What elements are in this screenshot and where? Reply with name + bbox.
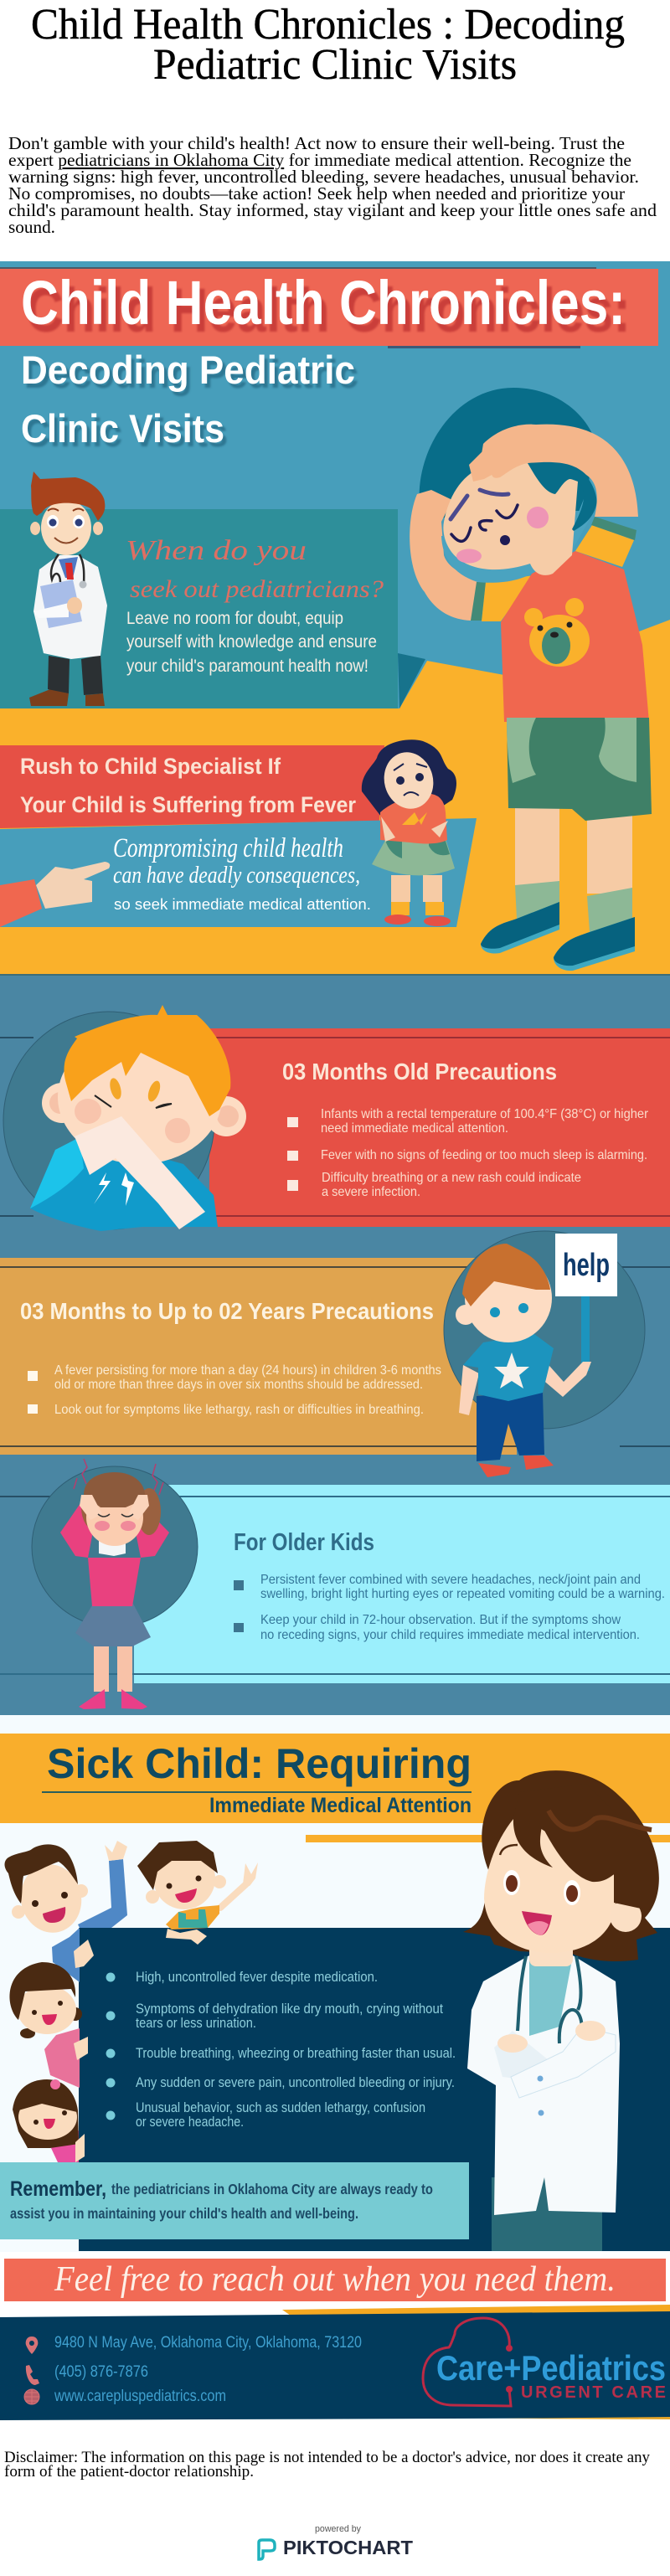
callout: when do you seek out pediatricians: When do you bbox=[126, 535, 307, 566]
title: Pediatric Clinic Visits bbox=[153, 41, 517, 89]
callout: when do you seek out pediatricians: seek out pediatricians? bbox=[130, 575, 384, 603]
callout: remember bbox=[0, 2162, 469, 2239]
panel: for older kids: Persistent fever combined with severe headaches, neck/joint pain and bbox=[260, 1573, 641, 1587]
panel: warning signs list: tears or less urination. bbox=[136, 2015, 256, 2031]
illustration: sick boy holding head bbox=[410, 388, 649, 722]
callout: remember: Remember, bbox=[10, 2177, 106, 2201]
illustration: boy shorts and legs bbox=[481, 718, 652, 971]
illustration: female doctor bbox=[463, 1770, 659, 2251]
icon: location pin bbox=[26, 2336, 38, 2354]
intro paragraph bbox=[8, 133, 657, 237]
callout: remember: assist you in maintaining your child's health and well-being. bbox=[10, 2205, 358, 2222]
callout: when do you seek out pediatricians bbox=[126, 535, 384, 676]
banner: rush to child specialist bbox=[0, 745, 384, 828]
banner: sick child requiring: Sick Child: Requiring bbox=[47, 1740, 472, 1787]
intro paragraph: child's paramount health. Stay informed, stay vigilant and keep your little ones safe and bbox=[8, 200, 657, 220]
panel: 03 months old precautions: Infants with a rectal temperature of 100.4°F (38°C) or higher bbox=[321, 1107, 649, 1121]
banner: sick child requiring bbox=[0, 1734, 670, 1842]
text: website: www.carepluspediatrics.com bbox=[54, 2388, 226, 2405]
intro paragraph: sound. bbox=[8, 217, 55, 237]
callout: when do you seek out pediatricians: your child's paramount health now! bbox=[126, 657, 368, 676]
child: girl with bow bbox=[13, 2079, 85, 2162]
intro paragraph: warning signs: high fever, uncontrolled bleeding, severe headaches, unusual behavior. bbox=[8, 167, 639, 187]
illustration: girl with headache bbox=[32, 1459, 198, 1709]
panel: warning signs list: Trouble breathing, wheezing or breathing faster than usual. bbox=[136, 2045, 456, 2061]
panel: 03 months old precautions: 03 Months Old Precautions bbox=[282, 1059, 557, 1084]
text: address: 9480 N May Ave, Oklahoma City, Oklahoma, 73120 bbox=[54, 2334, 362, 2352]
child: boy with overalls bbox=[137, 1841, 258, 1945]
piktochart credit: PIKTOCHART bbox=[283, 2537, 413, 2558]
panel: 03 months to 02 years precautions: Look out for symptoms like lethargy, rash or difficulties in breathing. bbox=[54, 1403, 424, 1417]
panel: sick child section background bbox=[0, 1715, 670, 2252]
panel: hero background bbox=[0, 261, 670, 975]
panel: 03 months old precautions bbox=[209, 1028, 670, 1227]
title: Child Health Chronicles : Decoding bbox=[31, 1, 625, 49]
banner: sick child requiring: Immediate Medical Attention bbox=[209, 1794, 472, 1817]
panel: warning signs list: Unusual behavior, such as sudden lethargy, confusion bbox=[136, 2099, 425, 2115]
panel: warning signs list bbox=[79, 1928, 670, 2251]
panel: warning signs list: Any sudden or severe pain, uncontrolled bleeding or injury. bbox=[136, 2074, 455, 2090]
illustration: upset girl bbox=[362, 739, 456, 926]
sign: help: help bbox=[563, 1248, 610, 1283]
panel: compromising child health: Compromising child health bbox=[113, 833, 343, 863]
intro paragraph: Don't gamble with your child's health! Act now to ensure their well-being. Trust the bbox=[8, 133, 625, 153]
panel: warning signs list: or severe headache. bbox=[136, 2114, 244, 2130]
panel: 03 months to 02 years precautions: old or more than three days in over six months should be addressed. bbox=[54, 1378, 423, 1392]
title bbox=[31, 1, 625, 89]
heading: decoding pediatric clinic visits bbox=[21, 348, 355, 451]
heading: decoding pediatric clinic visits: Clinic Visits bbox=[21, 406, 224, 451]
panel: contact footer bbox=[0, 2305, 670, 2420]
logo: care plus pediatrics: URGENT CARE bbox=[521, 2383, 666, 2402]
piktochart credit bbox=[259, 2524, 413, 2559]
panel: compromising child health bbox=[0, 818, 477, 927]
disclaimer: Disclaimer: The information on this page is not intended to be a doctor's advice, nor does it create any bbox=[4, 2450, 651, 2466]
callout: when do you seek out pediatricians: Leave no room for doubt, equip bbox=[126, 609, 343, 628]
intro paragraph: No compromises, no doubts—take action! Seek help when needed and prioritize your bbox=[8, 183, 625, 204]
banner: feel free to reach out: Feel free to reach out when you need them. bbox=[54, 2260, 616, 2299]
child: girl with pigtails bbox=[10, 1962, 88, 2088]
panel: warning signs list: Symptoms of dehydration like dry mouth, crying without bbox=[136, 2001, 443, 2017]
panel: 03 months to 02 years precautions: 03 Months to Up to 02 Years Precautions bbox=[20, 1298, 434, 1324]
panel: precautions background bbox=[0, 974, 670, 1715]
panel: for older kids: Keep your child in 72-hour observation. But if the symptoms show bbox=[260, 1613, 621, 1627]
text: phone: (405) 876-7876 bbox=[54, 2363, 148, 2381]
callout: remember: the pediatricians in Oklahoma City are always ready to bbox=[111, 2181, 433, 2197]
panel: compromising child health: so seek immediate medical attention. bbox=[114, 896, 371, 913]
panel: 03 months to 02 years precautions: A fever persisting for more than a day (24 hours) in children 3-6 months bbox=[54, 1363, 441, 1378]
illustration: male doctor bbox=[29, 471, 107, 706]
panel: 03 months old precautions: Difficulty breathing or a new rash could indicate bbox=[322, 1171, 581, 1185]
banner: rush to child specialist: Rush to Child Specialist If bbox=[20, 754, 281, 779]
icon: phone bbox=[26, 2365, 39, 2385]
intro paragraph: expert pediatricians in Oklahoma City for immediate medical attention. Recognize the bbox=[8, 150, 631, 170]
panel: compromising child health: can have deadly consequences, bbox=[113, 862, 360, 889]
disclaimer: form of the patient-doctor relationship. bbox=[4, 2464, 254, 2481]
illustration: boy with help sign bbox=[444, 1231, 645, 1477]
sign: help bbox=[555, 1234, 617, 1296]
illustration: sneezing boy bbox=[3, 1005, 246, 1231]
disclaimer bbox=[4, 2450, 651, 2481]
banner: rush to child specialist: Your Child is Suffering from Fever bbox=[20, 792, 356, 817]
panel: warning signs list: High, uncontrolled fever despite medication. bbox=[136, 1969, 378, 1985]
panel: 03 months old precautions: a severe infection. bbox=[322, 1185, 420, 1199]
child: father-like boy waving bbox=[5, 1841, 127, 1982]
illustration: four children bbox=[5, 1841, 258, 2162]
panel: 03 months old precautions: need immediate medical attention. bbox=[321, 1121, 508, 1136]
logo: care plus pediatrics bbox=[423, 2318, 666, 2406]
panel: for older kids: no receding signs, your child requires immediate medical intervention. bbox=[260, 1628, 640, 1642]
icon: globe bbox=[24, 2389, 39, 2404]
callout: when do you seek out pediatricians: yourself with knowledge and ensure bbox=[126, 632, 377, 652]
panel: 03 months to 02 years precautions bbox=[0, 1258, 517, 1455]
panel: for older kids bbox=[0, 1485, 670, 1683]
panel: for older kids: For Older Kids bbox=[234, 1529, 374, 1556]
heading: decoding pediatric clinic visits: Decoding Pediatric bbox=[21, 348, 355, 392]
piktochart credit: powered by bbox=[315, 2524, 361, 2534]
icon: pointing hand bbox=[0, 862, 110, 927]
